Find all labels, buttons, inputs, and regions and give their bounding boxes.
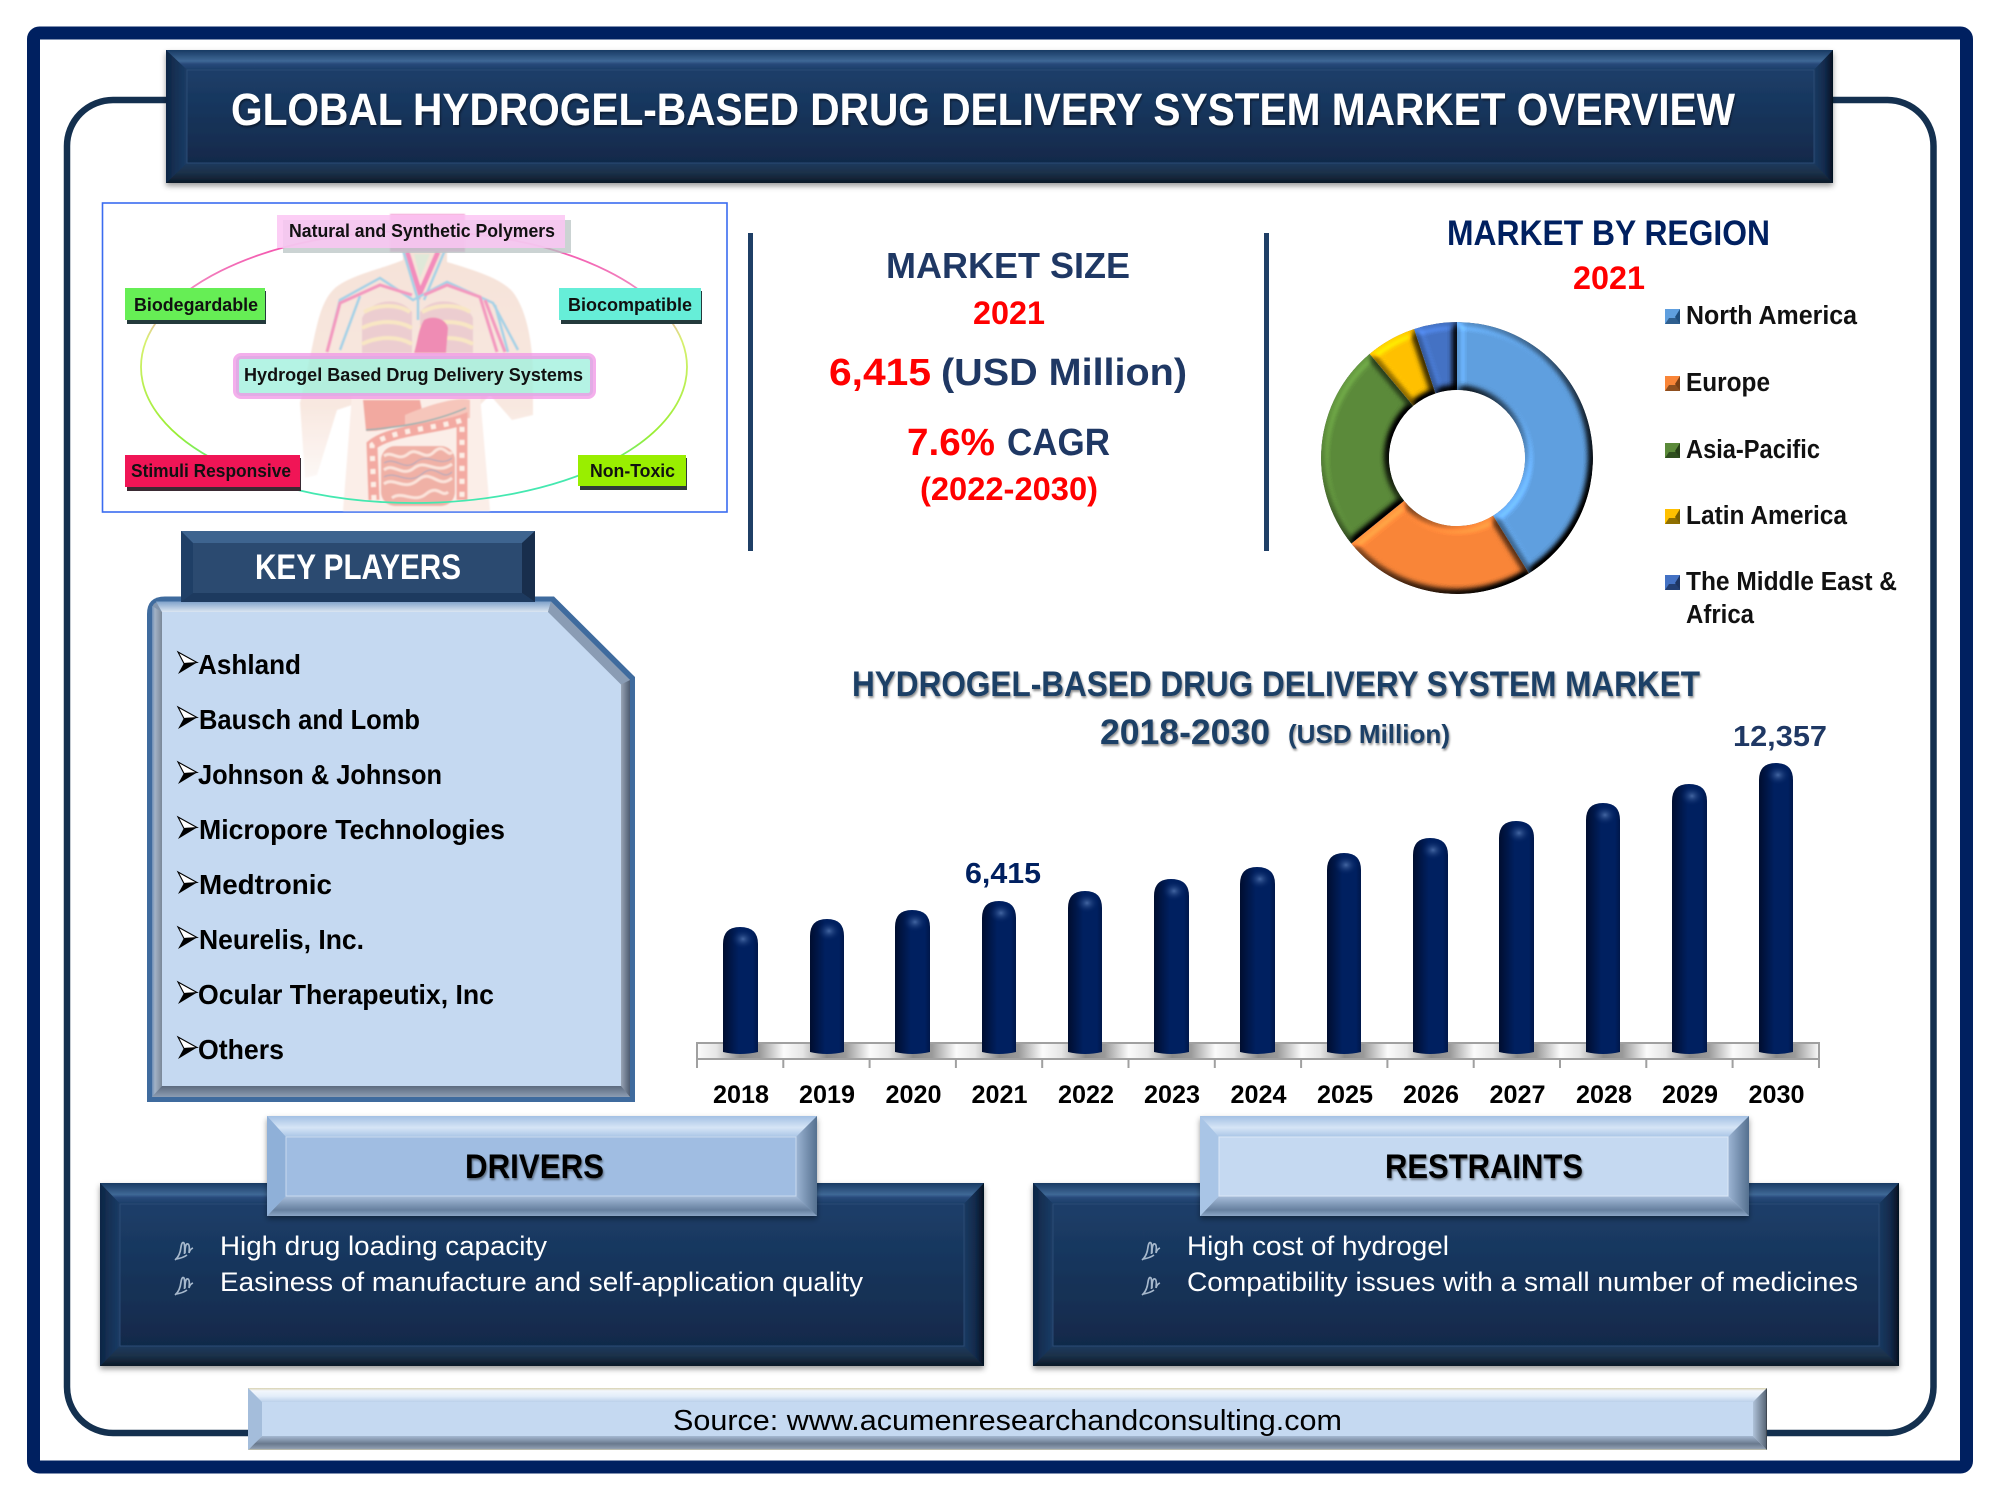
chart floor and ticks — [697, 1043, 1819, 1068]
label: stimuli responsive — [125, 455, 301, 491]
bar: 2030 — [1759, 763, 1793, 1054]
year: 2021 — [973, 295, 1045, 331]
bar: 2021 — [982, 901, 1016, 1054]
year axis labels: 2020 — [886, 1081, 942, 1109]
market size value: (USD Million) — [941, 352, 1187, 394]
bar: 2020 — [895, 910, 930, 1054]
label: biocompatible: Biocompatible — [568, 295, 692, 315]
player: ashland: Ashland — [198, 649, 301, 680]
chart title — [852, 664, 1700, 752]
value label 2021: 6,415 — [965, 858, 1041, 890]
label: non-toxic: Non-Toxic — [590, 461, 675, 481]
label: biodegardable: Biodegardable — [134, 295, 258, 315]
restraints body box — [1033, 1183, 1899, 1366]
label: hydrogel based drug delivery systems — [236, 356, 593, 396]
ellipse connector — [141, 231, 687, 503]
year axis labels: 2019 — [799, 1081, 855, 1109]
divider — [748, 233, 753, 551]
restraints heading tab — [1200, 1116, 1749, 1216]
divider — [1264, 233, 1269, 551]
player: ocular therapeutix: Ocular Therapeutix, Inc — [198, 979, 494, 1010]
year axis labels: 2025 — [1317, 1081, 1373, 1109]
restraint: compatibility issues: Compatibility issues with a small number of medicines — [1187, 1267, 1858, 1297]
year axis labels: 2021 — [972, 1081, 1028, 1109]
legend: the middle east and africa: Africa — [1686, 601, 1755, 629]
year axis labels: 2028 — [1576, 1081, 1632, 1109]
title: GLOBAL HYDROGEL-BASED DRUG DELIVERY SYSTEM MARKET OVERVIEW — [231, 84, 1735, 135]
illustration: human torso — [300, 214, 533, 511]
year axis labels: 2022 — [1058, 1081, 1114, 1109]
market size value: 6,415 — [829, 352, 931, 394]
market size value — [829, 352, 1187, 394]
drivers heading tab — [267, 1116, 817, 1216]
bar: 2026 — [1413, 838, 1448, 1054]
legend: europe: Europe — [1686, 369, 1770, 397]
bar: 2029 — [1672, 784, 1707, 1054]
legend: the middle east and africa: The Middle East & — [1686, 568, 1897, 596]
label: hydrogel based drug delivery systems: Hydrogel Based Drug Delivery Systems — [244, 365, 583, 385]
chart title: HYDROGEL-BASED DRUG DELIVERY SYSTEM MARKET — [852, 664, 1700, 704]
bar: 2025 — [1327, 853, 1361, 1054]
year axis labels: 2027 — [1490, 1081, 1546, 1109]
year axis labels: 2018 — [713, 1081, 769, 1109]
donut chart — [1321, 322, 1593, 594]
label: biodegardable — [125, 288, 266, 324]
restraint: high cost of hydrogel: High cost of hydrogel — [1187, 1231, 1449, 1261]
chart title: 2018-2030 — [1100, 712, 1270, 752]
legend: asia-pacific: Asia-Pacific — [1686, 436, 1820, 464]
year axis labels: 2024 — [1230, 1081, 1287, 1109]
panel: market size — [829, 245, 1187, 507]
legend: north america: North America — [1686, 302, 1858, 330]
player: others: Others — [198, 1034, 284, 1065]
legend: the middle east and africa — [1665, 568, 1897, 629]
bar: 2022 — [1068, 891, 1102, 1054]
bar: 2024 — [1240, 867, 1275, 1054]
player: johnson and johnson: Johnson & Johnson — [198, 759, 442, 790]
legend: latin america: Latin America — [1686, 502, 1848, 530]
source bar — [248, 1388, 1767, 1450]
label: natural and synthetic polymers — [277, 215, 571, 253]
bar: 2018 — [723, 927, 758, 1054]
bar: 2028 — [1586, 803, 1620, 1054]
driver: easiness of manufacture: Easiness of manufacture and self-application quality — [220, 1267, 864, 1297]
label: biocompatible — [559, 288, 702, 324]
value label 2030: 12,357 — [1733, 721, 1827, 753]
cagr: 7.6% — [907, 422, 995, 464]
drivers heading tab: DRIVERS — [465, 1148, 604, 1186]
title banner — [166, 50, 1833, 183]
panel: market by region — [1321, 214, 1897, 629]
label: natural and synthetic polymers: Natural and Synthetic Polymers — [289, 221, 555, 241]
player: micropore technologies: Micropore Technologies — [199, 814, 505, 845]
bar: 2019 — [810, 919, 844, 1054]
drivers body box — [100, 1183, 984, 1366]
legend — [1665, 302, 1897, 629]
year axis labels: 2029 — [1662, 1081, 1718, 1109]
bar: 2027 — [1499, 821, 1534, 1054]
restraints heading tab: RESTRAINTS — [1385, 1148, 1583, 1186]
heading tab: key players — [181, 531, 535, 602]
key players list box — [147, 596, 635, 1102]
bar: 2023 — [1154, 879, 1189, 1054]
heading tab: key players: KEY PLAYERS — [255, 548, 461, 587]
year axis labels: 2023 — [1144, 1081, 1200, 1109]
source text: Source: www.acumenresearchandconsulting.com — [673, 1405, 1342, 1437]
year axis labels — [713, 1081, 1804, 1109]
panel: key players — [147, 531, 635, 1102]
cagr: CAGR — [1007, 422, 1110, 464]
bars — [723, 763, 1793, 1054]
year: 2021 — [1573, 260, 1645, 296]
year axis labels: 2030 — [1748, 1081, 1804, 1109]
panel: hydrogel properties diagram — [102, 203, 727, 512]
player: neurelis: Neurelis, Inc. — [199, 924, 364, 955]
heading: market size: MARKET SIZE — [886, 245, 1130, 286]
label: stimuli responsive: Stimuli Responsive — [131, 461, 291, 481]
panel: restraints — [1033, 1116, 1899, 1366]
panel: market bar chart — [697, 664, 1827, 1109]
chart title: (USD Million) — [1288, 719, 1450, 749]
label: non-toxic — [578, 455, 687, 490]
cagr — [907, 422, 1110, 464]
heading: market by region: MARKET BY REGION — [1447, 214, 1770, 253]
year axis labels: 2026 — [1403, 1081, 1459, 1109]
panel: drivers — [100, 1116, 984, 1366]
player: bausch and lomb: Bausch and Lomb — [199, 704, 420, 735]
driver: high drug loading capacity: High drug loading capacity — [220, 1231, 548, 1261]
forecast period: (2022-2030) — [920, 471, 1098, 507]
player: medtronic: Medtronic — [199, 869, 332, 900]
